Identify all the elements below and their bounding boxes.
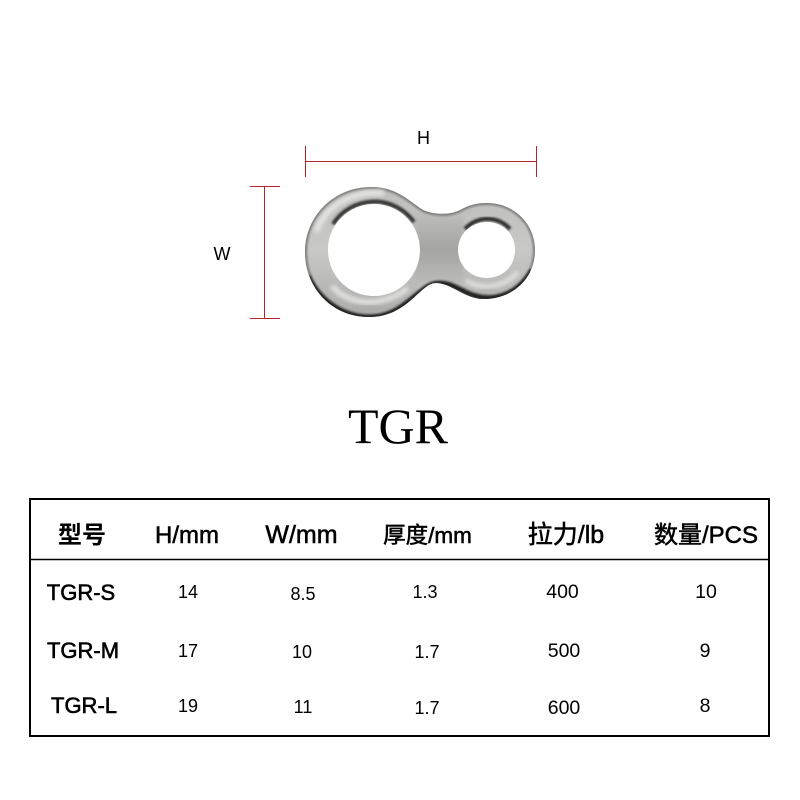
row: TGR-M: 9 [700,640,710,662]
dimension: H: H [417,128,430,148]
row: TGR-S [47,580,717,605]
ring lower inner light [332,286,408,302]
table header [58,521,758,549]
row: TGR-L: 1.7 [414,698,440,718]
ring dark inner bevel small [465,219,510,229]
table header: W/mm [265,521,338,549]
table header: 型号 [58,522,106,549]
row: TGR-L: 8 [700,695,710,717]
row: TGR-S: 14 [178,582,198,602]
table header: 拉力/lb [528,521,604,549]
ring small loop light [466,272,518,286]
table header: 厚度/mm [383,523,472,548]
row: TGR-S: 8.5 [290,584,316,604]
icon: figure-eight ring [305,187,535,317]
row: TGR-S: 400 [546,581,579,603]
row: TGR-L [51,693,710,719]
table header: 数量/PCS [654,522,758,549]
spec table [30,499,769,736]
row: TGR-M: 500 [548,640,580,662]
ring outer edge shading [305,187,535,317]
ring centre plate [414,212,465,276]
row: TGR-L: 11 [294,697,312,717]
ring dark inner bevel large [333,202,414,224]
row: TGR-S: 1.3 [412,582,438,602]
row: TGR-M: 1.7 [414,642,440,662]
row: TGR-M: TGR-M [47,638,119,663]
table header: H/mm [155,522,219,549]
ring top sheen [316,193,384,232]
title: TGR [348,398,449,454]
row: TGR-M: 10 [292,642,312,662]
row: TGR-S: TGR-S [47,580,115,605]
row: TGR-M [47,638,710,663]
ring lower shadow [308,270,532,317]
row: TGR-S: 10 [695,581,717,603]
dimension: W: W [214,244,230,264]
dimension: W [214,186,280,318]
row: TGR-L: TGR-L [51,693,117,718]
row: TGR-L: 600 [548,697,580,719]
row: TGR-L: 19 [178,696,198,716]
row: TGR-M: 17 [178,641,198,661]
